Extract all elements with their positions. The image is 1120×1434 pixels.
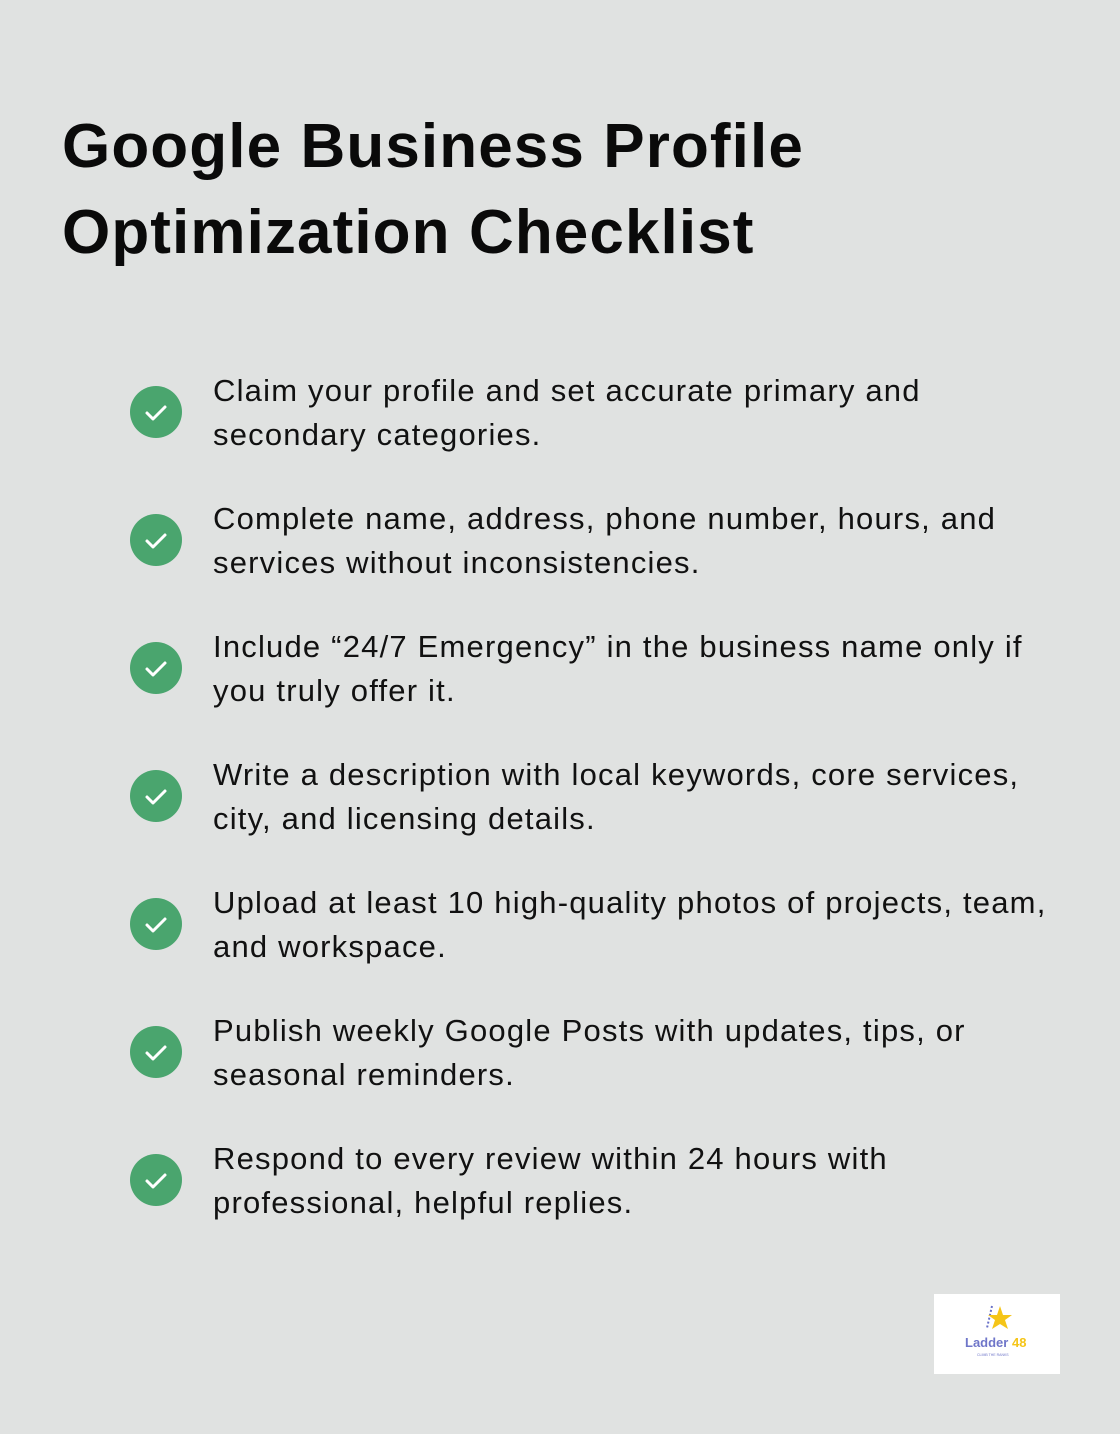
item 7 [130,1141,888,1220]
icon: check [130,386,182,438]
icon: check [130,1026,182,1078]
icon: check [130,642,182,694]
text [213,373,921,452]
item 6 [130,1013,966,1092]
text: Complete name, address, phone number, hours, and [213,501,996,536]
icon: check [130,514,182,566]
title: Optimization Checklist [62,198,755,267]
text [213,501,996,580]
text: services without inconsistencies. [213,545,701,580]
item 5 [130,885,1047,964]
text [213,629,1023,708]
text: you truly offer it. [213,673,456,708]
text: city, and licensing details. [213,801,596,836]
item 2 [130,501,996,580]
icon: check [130,1154,182,1206]
text [213,757,1019,836]
logo: Ladder 48 [965,1335,1026,1350]
text: secondary categories. [213,417,541,452]
text: Write a description with local keywords, core services, [213,757,1019,792]
icon: check [130,898,182,950]
title [62,112,804,267]
item 1 [130,373,921,452]
logo: CLIMB THE RANKS [977,1353,1009,1357]
text [213,1141,888,1220]
text: Claim your profile and set accurate primary and [213,373,921,408]
item 4 [130,757,1019,836]
text: and workspace. [213,929,447,964]
text: Upload at least 10 high-quality photos of projects, team, [213,885,1047,920]
text: seasonal reminders. [213,1057,515,1092]
icon: check [130,770,182,822]
title: Google Business Profile [62,112,804,181]
text: Publish weekly Google Posts with updates, tips, or [213,1013,966,1048]
text: professional, helpful replies. [213,1185,633,1220]
text [213,885,1047,964]
text: Include “24/7 Emergency” in the business name only if [213,629,1023,664]
text [213,1013,966,1092]
logo [934,1294,1060,1374]
text: Respond to every review within 24 hours with [213,1141,888,1176]
item 3 [130,629,1023,708]
